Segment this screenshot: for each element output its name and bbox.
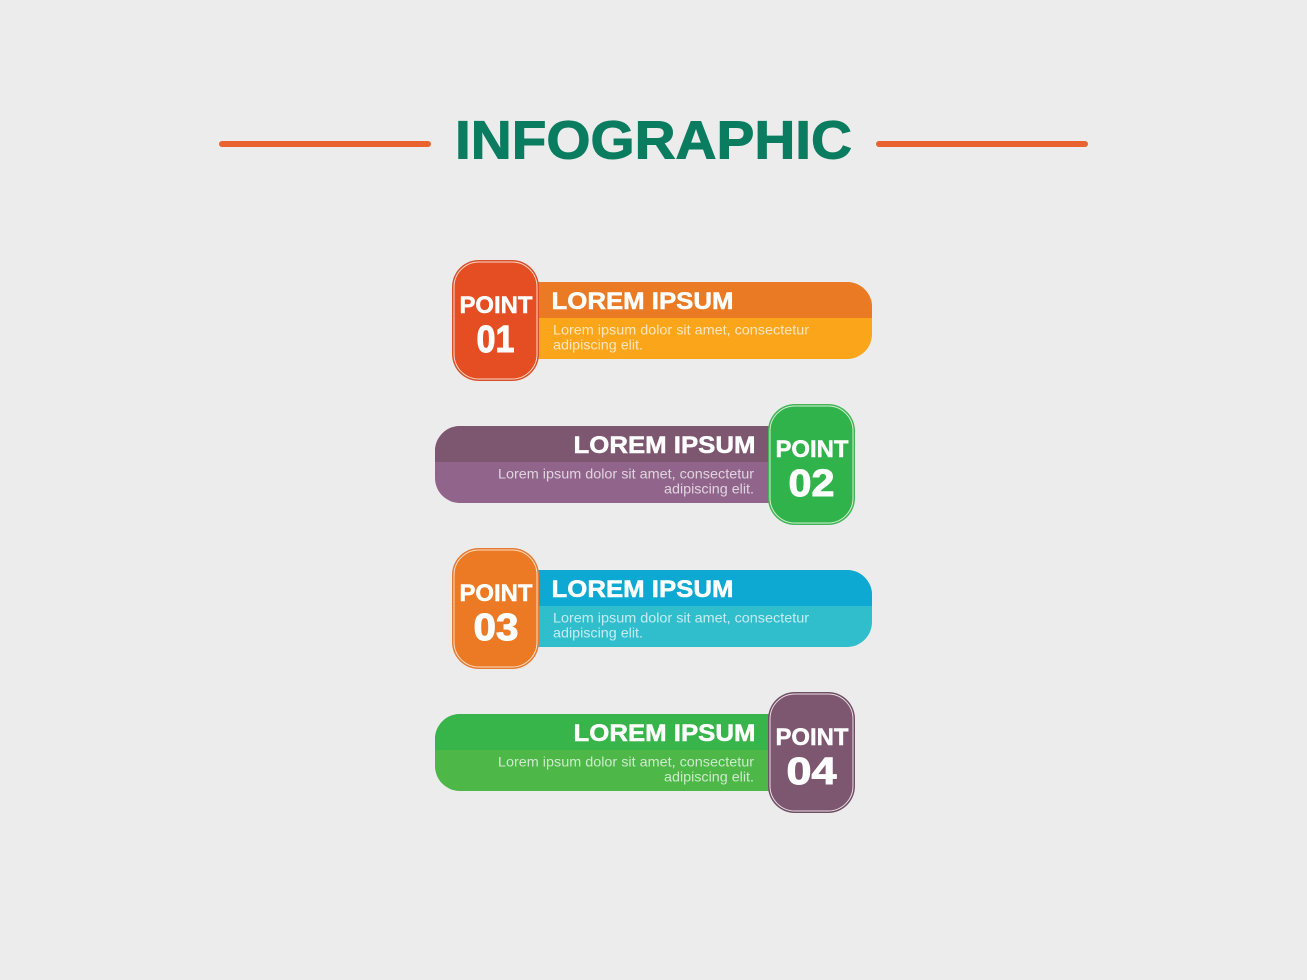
badge: 02	[788, 463, 834, 505]
description: adipiscing elit.	[553, 336, 643, 352]
badge: 04	[786, 751, 836, 793]
badge	[452, 260, 539, 381]
panel: point 03	[452, 548, 872, 669]
bar: heading band and description band	[435, 714, 778, 791]
description: Lorem ipsum dolor sit amet, consectetur	[553, 322, 809, 338]
header: title with side rules	[219, 110, 1088, 170]
description: Lorem ipsum dolor sit amet, consectetur	[498, 754, 754, 770]
badge	[768, 404, 855, 525]
description: Lorem ipsum dolor sit amet, consectetur	[553, 610, 809, 626]
badge	[452, 548, 539, 669]
description: Lorem ipsum dolor sit amet, consectetur	[498, 466, 754, 482]
bar: heading band and description band	[530, 282, 872, 359]
heading: LOREM IPSUM	[574, 432, 756, 459]
description	[498, 466, 754, 496]
description	[498, 754, 754, 784]
description: adipiscing elit.	[664, 768, 754, 784]
badge: POINT	[776, 436, 849, 463]
description: adipiscing elit.	[553, 624, 643, 640]
bar: heading band and description band	[530, 570, 872, 647]
panel: point 04	[435, 692, 855, 813]
badge: 03	[474, 607, 518, 649]
description	[553, 322, 809, 352]
description: adipiscing elit.	[664, 480, 754, 496]
title: INFOGRAPHIC	[455, 110, 852, 170]
badge: POINT	[776, 724, 849, 751]
badge: 01	[476, 319, 514, 361]
badge: POINT	[460, 292, 533, 319]
badge	[768, 692, 855, 813]
description	[553, 610, 809, 640]
panel: point 02	[435, 404, 855, 525]
heading: LOREM IPSUM	[574, 720, 756, 747]
heading: LOREM IPSUM	[552, 576, 734, 603]
right rule	[876, 141, 1088, 147]
heading: LOREM IPSUM	[552, 288, 734, 315]
badge: POINT	[460, 580, 533, 607]
left rule	[219, 141, 431, 147]
panel: point 01	[452, 260, 872, 381]
bar: heading band and description band	[435, 426, 778, 503]
